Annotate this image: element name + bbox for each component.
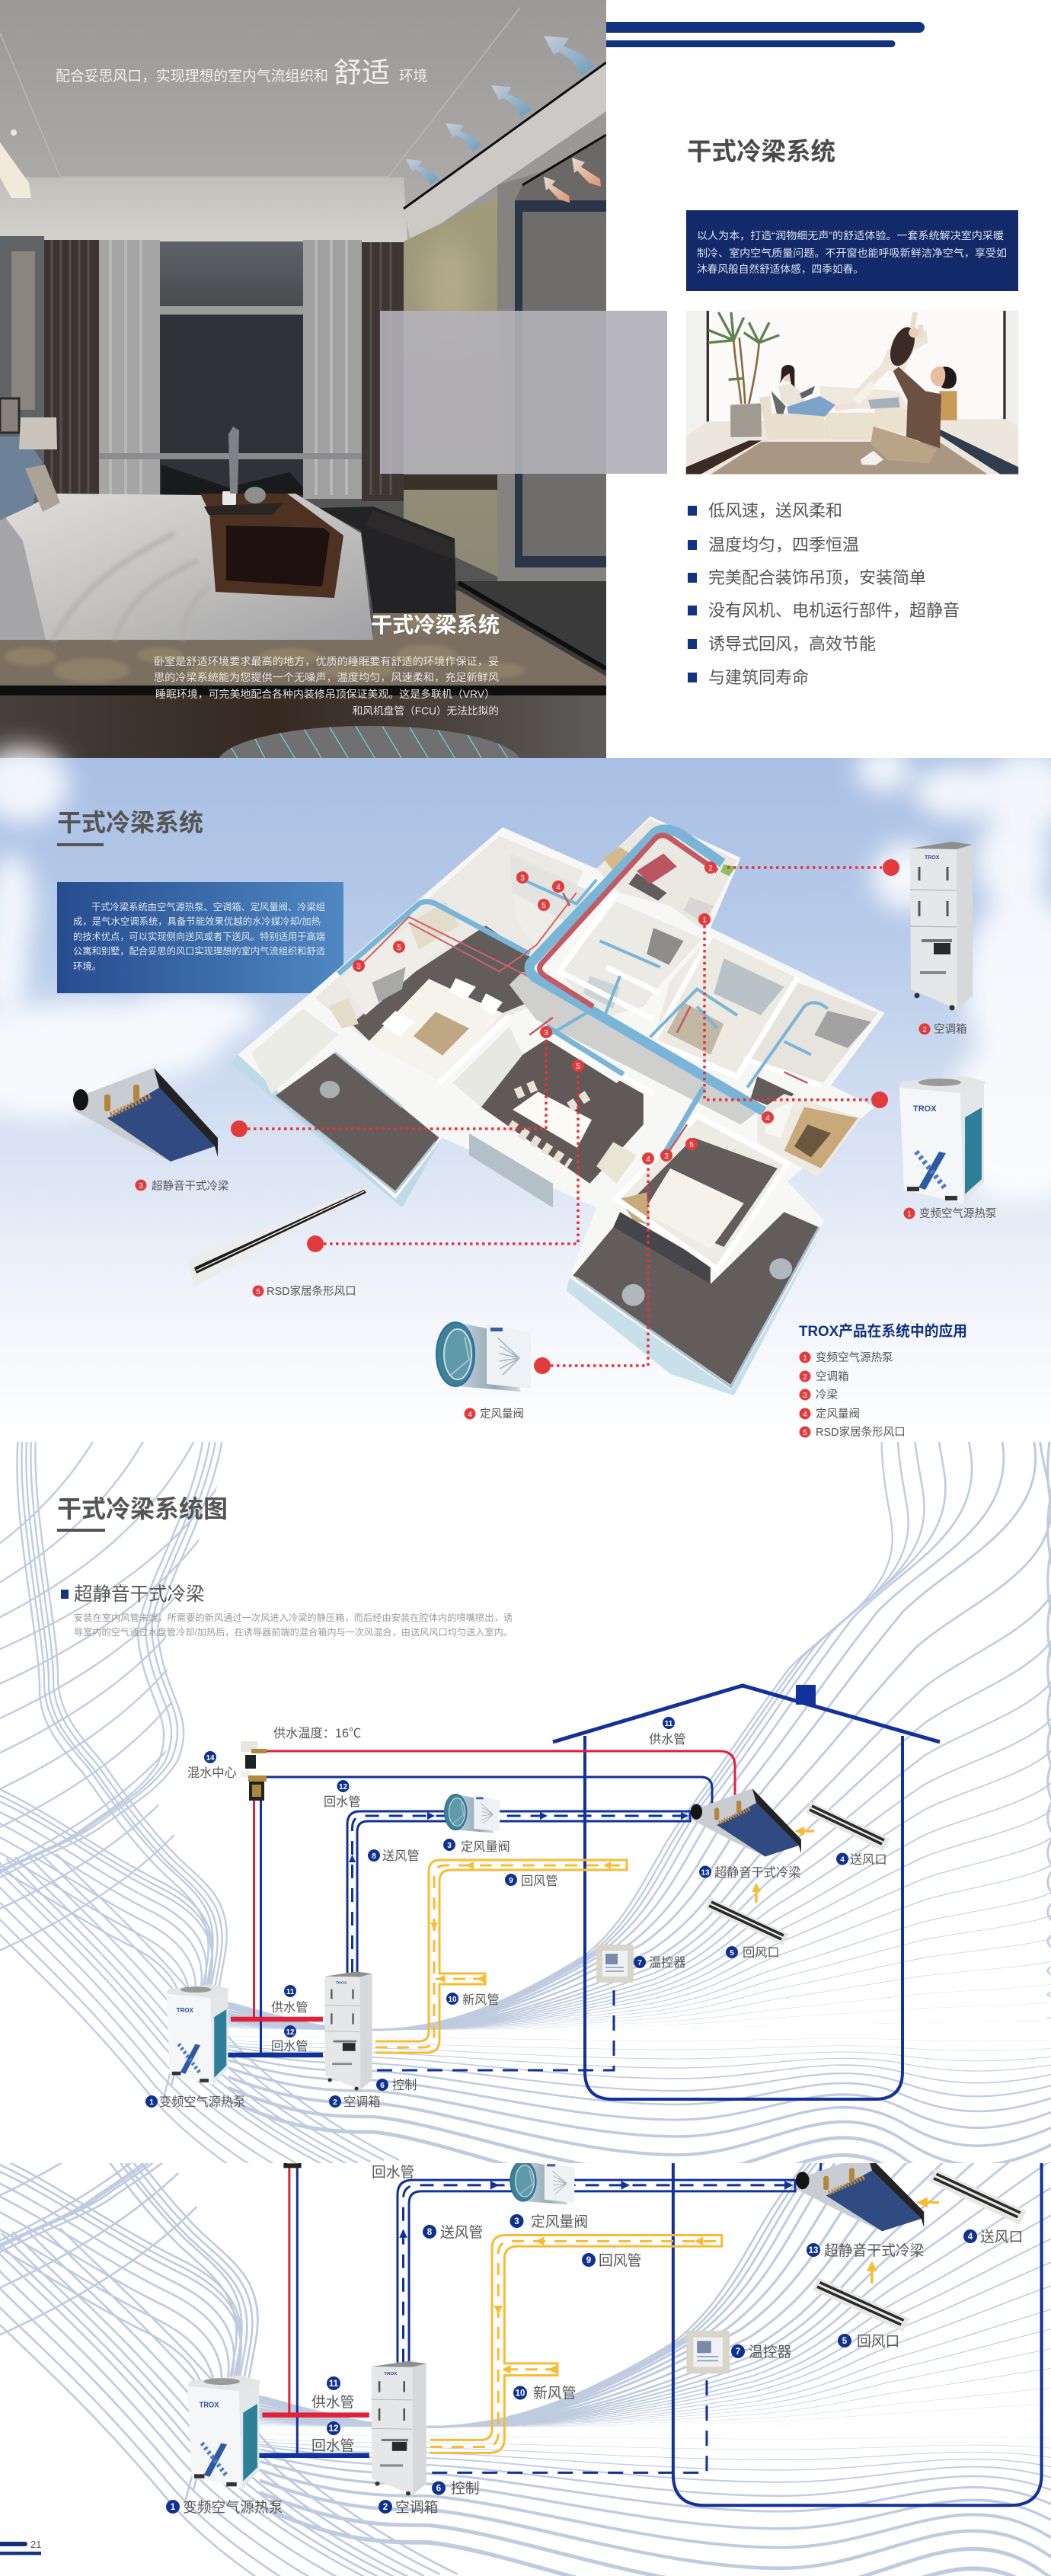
label: supply duct: 8 [372,1852,376,1861]
arrow: return air 1 [572,158,601,187]
feature list [688,501,960,687]
legend: TROX products: 5 [803,1429,807,1437]
arrow: supply air 1 [544,36,594,76]
label: supply duct: 送风管 [382,1849,420,1863]
decorative wave lines, upper [0,1442,1051,2226]
panel: navy intro box [686,210,1018,291]
label: control: 控制 [392,2079,417,2092]
panel: section three white background [0,1442,1051,2576]
label: heat pump: 1 [907,1210,912,1219]
label: return pipe: 回水管 [311,2437,354,2453]
panel: bedroom photo [0,0,606,802]
subheading: ultra silent beam: 超静音干式冷梁 [74,1584,204,1605]
label: supply pipe: 11 [286,1988,295,1996]
numbered markers on plan: 5 [397,944,401,952]
label: air volume valve: 3 [514,2217,519,2226]
label: supply pipe: 11 [329,2379,339,2389]
label: fresh air duct: 10 [516,2389,525,2398]
label: mixing center [187,1751,237,1780]
grille: return outlet [705,1897,789,1945]
legend: TROX products: 变频空气源热泵 [816,1351,893,1364]
product: chilled beam [73,1068,248,1162]
numbered markers on plan: 5 [541,902,546,910]
arrow: airflow into beam side [794,1827,814,1836]
label: air volume valve: 定风量阀 [461,1840,510,1854]
label: return outlet: 5 [730,1949,734,1958]
label: return outlet: 回风口 [743,1946,780,1960]
label: fresh air duct [513,2385,576,2401]
family photo [686,311,1018,475]
description paragraph: 安装在室内风管末端，所需要的新风通过一次风进入冷梁的静压箱，而后经由安装在腔体内的喷嘴喷出，诱 [74,1612,513,1623]
label: mixing center: 混水中心 [187,1766,237,1780]
bullet: building lifespan: 与建筑同寿命 [708,668,809,687]
label: heat pump: 变频空气源热泵 [183,2499,283,2515]
enlarged system diagram [187,2163,1043,2507]
label: return duct: 回风管 [599,2252,641,2268]
arrow: supply air 4 [406,159,439,185]
unit: air volume valve [445,1795,500,1833]
heading: system diagram: 干式冷梁系统图 [57,1495,228,1523]
arrow: supply air 3 [446,123,482,152]
numbered markers on plan: 3 [356,963,361,971]
panel: blue description box [57,882,343,993]
legend: TROX products: TROX产品在系统中的应用 [799,1322,967,1340]
label: air volume valve [443,1839,510,1854]
photo description text: 睡眠环境，可完美地配合各种内装修吊顶保证美观。这是多联机（VRV） [155,688,495,700]
bullet: even temperature: 温度均匀，四季恒温 [708,535,859,555]
description paragraph [74,1612,513,1638]
numbered markers on plan: 4 [556,884,561,892]
photo description text [154,655,499,717]
label: supply outlet: 送风口 [850,1853,887,1867]
headline with highlighted word: 舒适 [334,57,390,88]
label: return duct: 9 [586,2256,591,2265]
label: return outlet: 5 [842,2337,848,2346]
label: return pipe top: 回水管 [372,2164,414,2180]
numbered markers on plan: 4 [646,1155,650,1164]
legend: TROX products: RSD家居条形风口 [816,1426,906,1439]
label: return pipe lower: 12 [286,2028,295,2037]
decorative translucent block [380,311,667,474]
panel: navy intro box: 制冷、室内空气质量问题。不开窗也能呼吸新鲜洁净空气，享受如 [697,247,1007,259]
label: return outlet [838,2333,899,2349]
label: supply outlet: 4 [840,1855,845,1865]
duct: return and fresh air [375,1860,627,2053]
heading: dry chilled beam system: 干式冷梁系统 [687,138,835,165]
label: supply temperature: 供水温度：16℃ [273,1727,361,1740]
label: return pipe [324,1780,361,1809]
legend: TROX products: 4 [803,1411,807,1419]
label: return outlet: 回风口 [857,2333,899,2349]
label: chilled beam: 13 [701,1869,710,1877]
label: fresh air duct: 10 [448,1996,457,2004]
label: control: 6 [436,2485,441,2494]
panel: sky background [0,758,1051,1442]
decorative wave lines, lower [0,2163,1051,2576]
numbered markers on plan: 1 [702,916,707,925]
label: chilled beam: 3 [139,1182,143,1191]
panel: blue description box: 的技术优点，可以实现侧向送风或者下送风。特别适用于高端 [73,931,325,942]
unit: heat pump [166,1984,229,2085]
system diagram [166,1685,940,2099]
numbered markers on plan: 5 [576,1063,580,1071]
bullet: induced return air: 诱导式回风，高效节能 [708,634,876,654]
label: supply pipe in house [649,1717,686,1747]
label: return pipe lower: 回水管 [271,2040,308,2053]
label: supply duct: 8 [427,2228,433,2237]
label: air volume valve: 4 [468,1411,472,1419]
product: linear diffuser [187,1187,369,1286]
house outline [553,1685,940,2099]
label: linear diffuser: 5 [256,1288,260,1296]
label: chilled beam: 超静音干式冷梁 [152,1180,228,1193]
panel: blue description box: 环境。 [73,960,101,972]
photo description text: 和风机盘管（FCU）无法比拟的 [353,705,499,717]
label: thermostat: 7 [637,1959,642,1967]
product: air handling unit [883,842,973,1010]
label: control [376,2079,417,2092]
label: supply duct: 送风管 [440,2224,483,2240]
photo description text: 卧室是舒适环境要求最高的地方，优质的睡眠要有舒适的环境作保证，妥 [154,655,499,667]
label: return pipe: 回水管 [324,1795,361,1809]
label: return duct: 9 [509,1877,513,1885]
numbered markers on plan [353,861,774,1165]
legend: TROX products: 2 [803,1373,807,1382]
label: air volume valve: 定风量阀 [531,2213,588,2229]
panel: navy intro box: 以人为本，打造“润物细无声”的舒适体验。一套系统解决室内采暖 [697,229,1005,241]
headline with highlighted word [56,58,426,85]
label: air volume valve: 3 [447,1842,452,1850]
legend: TROX products: 空调箱 [816,1370,848,1383]
legend: TROX products: 3 [803,1392,807,1400]
photo description text: 思的冷梁系统能为您提供一个无噪声，温度均匀，风速柔和，充足新鲜风 [154,671,499,683]
arrow: airflow into beam bottom [752,1883,761,1903]
label: thermostat: 温控器 [749,2344,792,2360]
label: return duct: 回风管 [521,1874,558,1888]
grille: supply outlet [806,1801,890,1851]
unit: air handling unit [324,1971,372,2091]
label: fresh air duct: 新风管 [462,1993,500,2007]
panel: blue description box: 成，是气水空调系统，具备节能效果优越的水冷媒冷却/加热 [73,916,321,927]
label: heat pump: 1 [171,2503,176,2512]
headline with highlighted word: 配合妥思风口，实现理想的室内气流组织和 [56,68,328,84]
label: supply outlet: 送风口 [980,2229,1023,2245]
control signal line [377,1984,614,2070]
label: thermostat: 7 [736,2347,740,2357]
pipes: chilled water loop [226,1751,735,2055]
label: air handling unit: 2 [333,2098,337,2107]
label: fresh air duct [446,1993,500,2007]
label: air volume valve: 定风量阀 [480,1408,524,1421]
legend: TROX products: 1 [803,1354,807,1363]
heading: system section: 干式冷梁系统 [57,809,203,836]
label: control: 控制 [451,2480,480,2496]
product: air volume valve [436,1322,551,1392]
heading on photo: 干式冷梁系统 [371,613,500,637]
numbered markers on plan: 4 [765,1114,770,1123]
headline with highlighted word: 环境 [399,68,427,84]
label: thermostat: 温控器 [649,1956,686,1970]
label: return duct [505,1874,558,1888]
label: air handling unit: 空调箱 [343,2095,381,2109]
label: chilled beam: 13 [809,2246,818,2255]
label: supply pipe: 供水管 [271,2001,308,2015]
label: heat pump: 变频空气源热泵 [159,2095,245,2109]
arrow: supply air 2 [491,85,532,117]
dotted leader lines [248,868,882,1366]
lower diagram labels [166,2164,1023,2515]
label: return pipe: 12 [339,1783,347,1791]
label: mixing center: 14 [206,1754,215,1763]
bullet: ceiling match: 完美配合装饰吊顶，安装简单 [708,568,926,587]
label: control: 6 [380,2082,385,2090]
label: air handling unit [918,1023,967,1036]
label: return outlet [726,1946,780,1960]
label: return pipe [311,2421,354,2453]
label: control [432,2480,480,2496]
label: return pipe lower [271,2025,308,2053]
label: air handling unit: 空调箱 [934,1023,967,1036]
label: air handling unit: 空调箱 [395,2499,438,2515]
bullet: silent operation: 没有风机、电机运行部件，超静音 [708,601,960,620]
label: chilled beam: 超静音干式冷梁 [824,2242,925,2258]
numbered markers on plan: 3 [544,1029,548,1037]
legend: TROX products [799,1322,967,1439]
legend: TROX products: 定风量阀 [816,1408,860,1421]
page number: 21 [30,2539,41,2550]
mixing center [241,1741,267,1801]
unit: chilled beam [691,1788,801,1857]
numbered markers on plan: 3 [520,874,525,883]
label: return pipe: 12 [329,2424,338,2434]
header bars [606,22,925,47]
panel: navy intro box: 沐春风般自然舒适体感，四季如春。 [697,263,864,275]
label: supply pipe in house: 11 [665,1720,673,1728]
label: chilled beam: 超静音干式冷梁 [714,1866,800,1880]
panel: blue description box: 干式冷梁系统由空气源热泵、空调箱、定风量阀、冷梁组 [91,901,325,912]
label: supply pipe [271,1985,308,2015]
unit: thermostat [596,1945,634,1983]
upper diagram labels [145,1717,887,2109]
decorative clouds [0,746,1051,1203]
label: heat pump: 1 [149,2098,154,2107]
page number [0,2539,41,2555]
panel: blue description box: 公寓和别墅，配合妥思的风口实现理想的室内气流组织和舒适 [73,945,325,957]
isometric apartment cutaway [232,817,885,1395]
label: air handling unit: 2 [922,1026,927,1034]
label: supply pipe in house: 供水管 [649,1733,686,1747]
description paragraph: 导室内的空气通过水盘管冷却/加热后，在诱导器前端的混合箱内与一次风混合，由送风风口均匀送入室内。 [74,1626,513,1638]
numbered markers on plan: 5 [689,1141,694,1149]
label: linear diffuser: RSD家居条形风口 [267,1285,356,1298]
product: heat pump [871,1075,986,1203]
numbered markers on plan: 2 [708,865,713,873]
label: supply outlet: 4 [968,2232,973,2242]
label: fresh air duct: 新风管 [533,2385,576,2401]
numbered markers on plan: 3 [664,1152,669,1161]
label: air handling unit: 2 [383,2503,388,2512]
bullet: low wind speed: 低风速，送风柔和 [708,501,842,520]
label: supply pipe: 供水管 [311,2394,354,2410]
icon: ventilation slots [404,62,606,209]
legend: TROX products: 冷梁 [816,1389,838,1401]
label: supply pipe [311,2376,354,2410]
duct: supply air [347,1811,690,1973]
arrow: return air 2 [544,177,570,203]
label: heat pump: 变频空气源热泵 [919,1207,996,1220]
label: air volume valve [465,1408,524,1421]
